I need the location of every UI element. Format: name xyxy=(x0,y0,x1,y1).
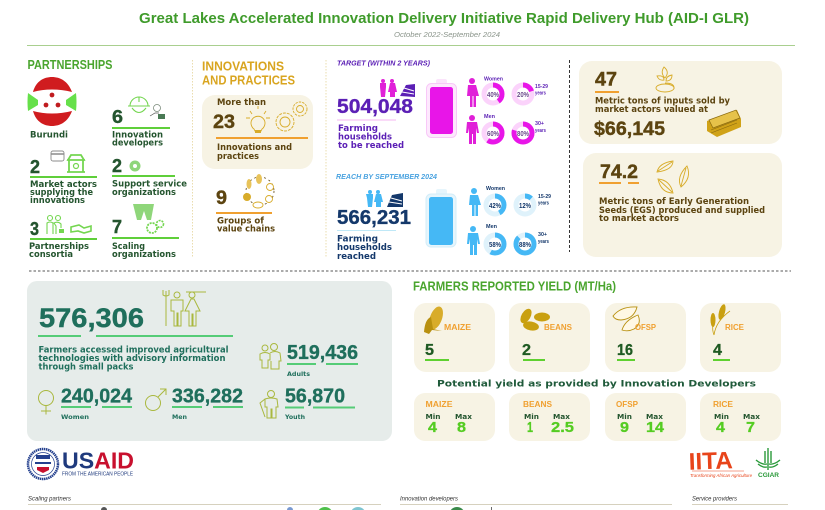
card: 23 innovations: More than xyxy=(217,97,266,107)
panel: reach xyxy=(336,172,551,262)
icon: Burundi flag xyxy=(28,77,76,126)
heading: target: TARGET (WITHIN 2 YEARS) xyxy=(337,59,430,68)
stat: scaling organizations xyxy=(112,204,179,259)
label: 15-29 years: 15-29 xyxy=(538,194,551,200)
heading: innovations and practices: INNOVATIONS xyxy=(202,60,284,74)
label: 30+ years: years xyxy=(535,128,546,134)
heading: innovations and practices xyxy=(202,60,295,88)
card: maize potential xyxy=(414,393,495,441)
icon: beans xyxy=(518,307,550,332)
stat: groups of value chains: value chains xyxy=(217,224,275,234)
panel: innovations and practices xyxy=(202,60,313,234)
icon: value chain ring xyxy=(243,174,274,208)
stat: scaling organizations: 7 xyxy=(112,217,122,237)
card: beans potential: BEANS xyxy=(523,400,552,409)
donut: men 60%: 60% xyxy=(487,129,499,138)
footer: service providers: Service providers xyxy=(692,496,738,503)
card: ofsp potential: 14 xyxy=(646,419,665,436)
card: rice potential: 7 xyxy=(746,419,755,436)
panel: inputs sold xyxy=(579,61,782,144)
label: 15-29 years xyxy=(535,84,548,96)
donut: men 58% xyxy=(486,235,504,253)
label: farming households to be reached: Farming xyxy=(338,124,378,134)
icon: farmers and field xyxy=(380,79,415,97)
stat: men: 336,282 xyxy=(172,386,243,408)
label: men: Men xyxy=(486,224,497,230)
stat: innovation developers: Innovation xyxy=(112,130,163,140)
donut: 15-29 years 12% xyxy=(516,196,534,214)
label: 30+ years: 30+ xyxy=(535,121,544,127)
stat: youth xyxy=(260,386,355,421)
card: maize potential: 4 xyxy=(428,419,438,436)
panel: inputs sold: market actors valued at xyxy=(595,104,708,114)
card: beans yield: BEANS xyxy=(544,323,572,332)
heading: farmers reported yield: FARMERS REPORTED YIELD (MT/Ha) xyxy=(413,280,616,294)
card: maize yield: MAIZE xyxy=(444,323,471,332)
stat: women: Women xyxy=(61,413,89,421)
card: 23 innovations xyxy=(202,95,313,169)
card: maize yield xyxy=(414,303,495,372)
donut: women 40%: 40% xyxy=(487,90,499,99)
donut: women 42%: 42% xyxy=(489,201,501,210)
icon: maize xyxy=(424,305,446,334)
donut: men 58%: 58% xyxy=(489,240,501,249)
card: rice yield: RICE xyxy=(725,323,744,332)
donut: 15-29 years 20% xyxy=(514,85,532,103)
card: rice potential: Max xyxy=(743,412,760,421)
donut: 30+ years 88% xyxy=(516,235,534,253)
label: women: Women xyxy=(486,186,505,192)
icon: sweet potato xyxy=(613,307,639,331)
panel: inputs sold: Metric tons of inputs sold by xyxy=(595,96,731,106)
label: farming households to be reached: households xyxy=(338,133,392,143)
label: 15-29 years: years xyxy=(538,200,549,206)
card: 23 innovations: practices xyxy=(217,151,259,161)
icon: man xyxy=(467,226,480,255)
stat: men xyxy=(146,386,243,421)
card: beans potential: 2.5 xyxy=(551,419,574,436)
heading: partnerships: PARTNERSHIPS xyxy=(28,58,112,72)
icon: sprout xyxy=(656,67,674,92)
stat: market actors: Market actors xyxy=(30,179,97,189)
donut: 15-29 years 12%: 12% xyxy=(519,201,531,210)
panel: early generation seeds xyxy=(583,153,782,257)
card: beans yield: 2 xyxy=(522,342,531,359)
icon: woman xyxy=(467,78,479,107)
label: women: Women xyxy=(484,77,503,83)
card: rice yield: 4 xyxy=(713,342,722,359)
icon: money stack xyxy=(707,110,741,137)
stat: innovation developers xyxy=(112,97,170,148)
panel: farmers accessed technologies: through small packs xyxy=(38,362,134,372)
icon: rice xyxy=(710,303,730,335)
label: farming households reached: Farming xyxy=(337,235,378,245)
icon: man xyxy=(466,115,479,144)
stat: scaling organizations: organizations xyxy=(112,249,176,259)
stat: 504,048: 504,048 xyxy=(337,96,413,118)
panel: target xyxy=(337,59,548,151)
logo: USAID xyxy=(28,448,134,479)
panel: farmers accessed technologies: Farmers accessed improved agricultural xyxy=(38,345,229,355)
panel: early generation seeds: to market actors xyxy=(599,213,679,223)
label: farming households to be reached: to be reached xyxy=(338,141,404,151)
label: 30+ years xyxy=(538,232,549,245)
heading: reach: REACH BY SEPTEMBER 2024 xyxy=(336,172,438,181)
icon: light bulb and gears xyxy=(246,102,307,133)
icon: battery target xyxy=(426,79,456,138)
donut: men 60% xyxy=(484,124,502,142)
logo: USAID: FROM THE AMERICAN PEOPLE xyxy=(62,472,134,478)
stat: women xyxy=(38,386,133,421)
card: ofsp yield xyxy=(605,303,686,372)
logo: IITA xyxy=(688,447,752,478)
card: 23 innovations: Innovations and xyxy=(217,142,292,152)
card: rice potential: RICE xyxy=(713,400,733,409)
label: 15-29 years: years xyxy=(535,90,546,96)
panel: inputs sold: 47 xyxy=(595,70,617,91)
label: 30+ years xyxy=(535,121,546,134)
label: Burundi: Burundi xyxy=(30,130,68,140)
stat: innovation developers: 6 xyxy=(112,107,123,127)
icon: battery reach xyxy=(426,189,456,247)
stat: partnerships consortia: 3 xyxy=(30,219,39,239)
label: 15-29 years xyxy=(538,194,551,206)
icon: farmer couple xyxy=(163,290,206,326)
panel: farmers accessed technologies: technologies with advisory information xyxy=(38,353,226,363)
stat: adults xyxy=(260,342,358,378)
donut: 30+ years 80% xyxy=(514,124,532,142)
stat: partnerships consortia: Partnerships xyxy=(29,241,89,251)
panel: farmers accessed technologies: 576,306 xyxy=(39,303,144,333)
heading: potential yield: Potential yield as provided by Innovation Developers xyxy=(437,380,756,390)
stat: scaling organizations: Scaling xyxy=(112,241,145,251)
card: beans potential: Min xyxy=(524,412,539,421)
donut: women 42% xyxy=(486,196,504,214)
label: men: Men xyxy=(484,114,495,120)
card: ofsp yield: 16 xyxy=(617,342,633,359)
logo: IITA: Transforming African Agriculture xyxy=(690,473,752,478)
card: ofsp potential: Min xyxy=(617,412,632,421)
footer: scaling partners xyxy=(28,496,381,510)
panel: early generation seeds: Seeds (EGS) produced and supplied xyxy=(599,205,765,215)
stat: 566,231: 566,231 xyxy=(337,207,411,229)
stat: adults: Adults xyxy=(287,370,310,378)
icon: woman xyxy=(469,188,481,216)
logo: CGIAR xyxy=(756,448,780,479)
card: ofsp potential: Max xyxy=(646,412,663,421)
card: maize potential: 8 xyxy=(457,419,466,436)
icon: seeds xyxy=(657,161,689,193)
card: beans potential: 1 xyxy=(527,419,533,436)
card: ofsp potential xyxy=(605,393,686,441)
stat: men: Men xyxy=(172,413,187,421)
stat: market actors: 2 xyxy=(30,157,40,177)
card: beans potential: Max xyxy=(553,412,570,421)
stat: innovation developers: developers xyxy=(112,138,163,148)
heading: innovations and practices: AND PRACTICES xyxy=(202,74,295,88)
label: farming households reached xyxy=(337,235,392,262)
subtitle: period: October 2022-September 2024 xyxy=(394,32,500,39)
card: rice potential: Min xyxy=(714,412,729,421)
logo: USAID: USAID xyxy=(62,448,134,474)
stat: youth: Youth xyxy=(284,413,305,421)
card: rice potential xyxy=(700,393,781,441)
card: ofsp potential: 9 xyxy=(620,419,629,436)
stat: adults: 519,436 xyxy=(287,342,358,364)
card: ofsp yield: OFSP xyxy=(635,323,656,332)
card: beans yield xyxy=(509,303,590,372)
stat: market actors: supplying the xyxy=(30,187,93,197)
donut: women 40% xyxy=(484,85,502,103)
stat: groups of value chains: 9 xyxy=(216,188,227,209)
logo: IITA: IITA xyxy=(688,447,733,476)
card: rice yield xyxy=(700,303,781,372)
stat: youth: 56,870 xyxy=(285,386,345,408)
card: rice potential: 4 xyxy=(716,419,726,436)
stat: partnerships consortia xyxy=(29,216,97,259)
panel: inputs sold: $66,145 xyxy=(594,119,665,140)
card: maize potential: Max xyxy=(455,412,472,421)
label: farming households reached: reached xyxy=(337,252,376,262)
panel: early generation seeds: Metric tons of Early Generation xyxy=(599,196,749,206)
stat: women: 240,024 xyxy=(61,386,133,408)
label: 15-29 years: 15-29 xyxy=(535,84,548,90)
label: farming households reached: households xyxy=(337,243,392,253)
card: maize yield: 5 xyxy=(425,342,434,359)
label: farming households to be reached xyxy=(338,124,404,151)
footer: innovation developers: Innovation developers xyxy=(400,496,459,503)
stat: market actors: innovations xyxy=(30,195,85,205)
icon: farmers and field xyxy=(366,190,403,207)
donut: 30+ years 88%: 88% xyxy=(519,240,531,249)
panel: farmers accessed technologies xyxy=(27,281,392,441)
panel: early generation seeds: 74.2 xyxy=(600,162,638,183)
footer: innovation developers xyxy=(400,496,672,510)
label: 30+ years: years xyxy=(538,239,549,245)
card: 23 innovations: 23 xyxy=(213,112,235,133)
card: maize potential: MAIZE xyxy=(426,400,452,409)
footer: scaling partners: Scaling partners xyxy=(28,496,72,503)
title: Great Lakes Accelerated Innovation Delivery Initiative Rapid Delivery Hub (AID-I GLR) xyxy=(139,11,749,27)
stat: partnerships consortia: consortia xyxy=(29,249,73,259)
logo: CGIAR: CGIAR xyxy=(758,472,779,479)
card: maize potential: Min xyxy=(426,412,440,421)
donut: 30+ years 80%: 80% xyxy=(517,129,529,138)
stat: support service organizations xyxy=(112,156,187,197)
panel: partnerships xyxy=(28,58,187,259)
stat: support service organizations: 2 xyxy=(112,156,122,176)
stat: support service organizations: organizations xyxy=(112,187,176,197)
card: ofsp potential: OFSP xyxy=(616,400,638,409)
donut: 15-29 years 20%: 20% xyxy=(517,90,529,99)
stat: groups of value chains xyxy=(216,174,275,234)
card: beans potential xyxy=(509,393,590,441)
label: 30+ years: 30+ xyxy=(538,232,547,238)
stat: groups of value chains: Groups of xyxy=(217,216,264,226)
footer: service providers xyxy=(692,496,788,504)
stat: market actors xyxy=(30,151,97,205)
stat: support service organizations: Support service xyxy=(112,179,187,189)
